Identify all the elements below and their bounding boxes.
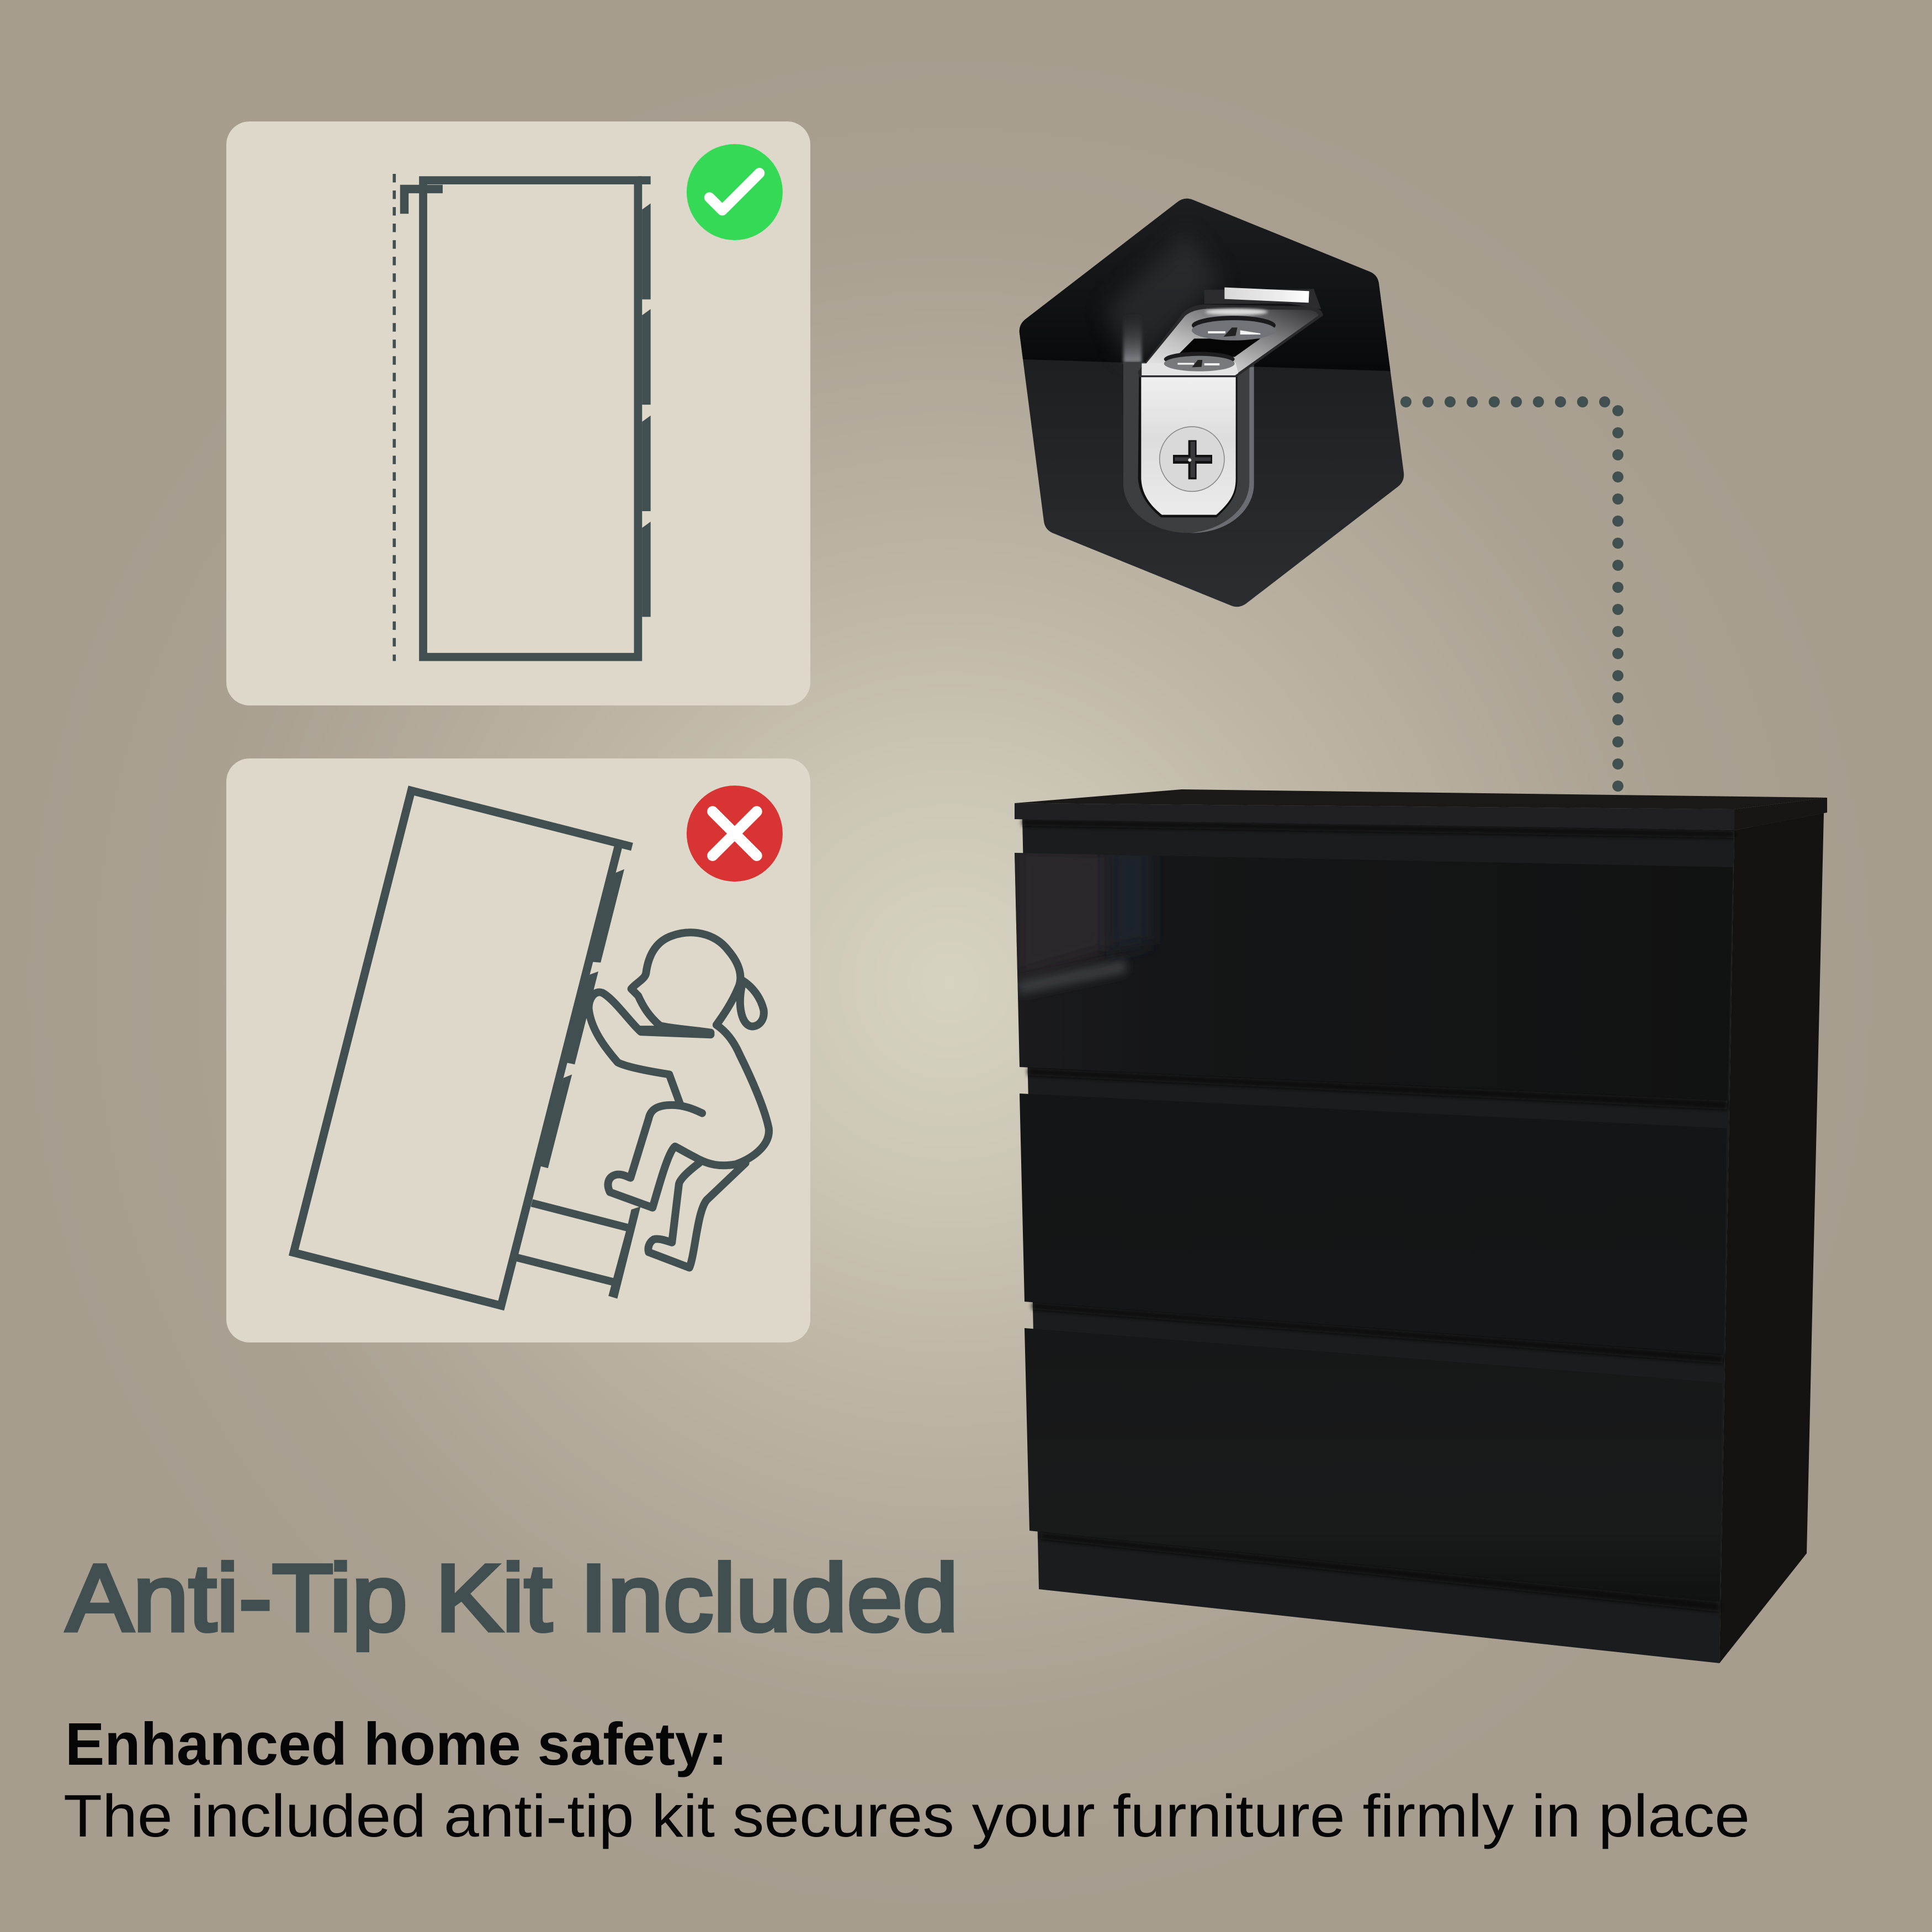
cabinet top — [1015, 789, 1827, 809]
title: Anti-Tip Kit Included — [66, 1545, 958, 1651]
panel: correct anchored cabinet — [226, 121, 810, 705]
drawer 2 — [1020, 1094, 1727, 1354]
hexagon background — [1010, 188, 1413, 618]
drawer 1 — [1015, 845, 1733, 1100]
description: The included anti-tip kit secures your furniture firmly in place — [63, 1782, 1750, 1850]
cabinet side panel — [1719, 813, 1824, 1663]
icon: climbing child — [588, 932, 769, 1268]
icon: red cross badge — [687, 785, 783, 882]
hexagon bracket detail — [1010, 188, 1413, 618]
dotted connector — [1406, 402, 1618, 787]
shadows under the top and drawers — [1022, 819, 1734, 1612]
subheading: Enhanced home safety: — [65, 1711, 728, 1778]
icon: anchored cabinet side view — [394, 174, 651, 661]
drawer 3 — [1025, 1328, 1722, 1601]
dresser — [1015, 789, 1827, 1663]
icon: green check badge — [687, 144, 783, 240]
panel: tipping cabinet warning — [226, 758, 810, 1342]
cabinet front frame — [1022, 819, 1734, 1663]
icon: tipping cabinet — [294, 790, 640, 1305]
icon: metal anti-tip bracket — [1123, 288, 1323, 533]
